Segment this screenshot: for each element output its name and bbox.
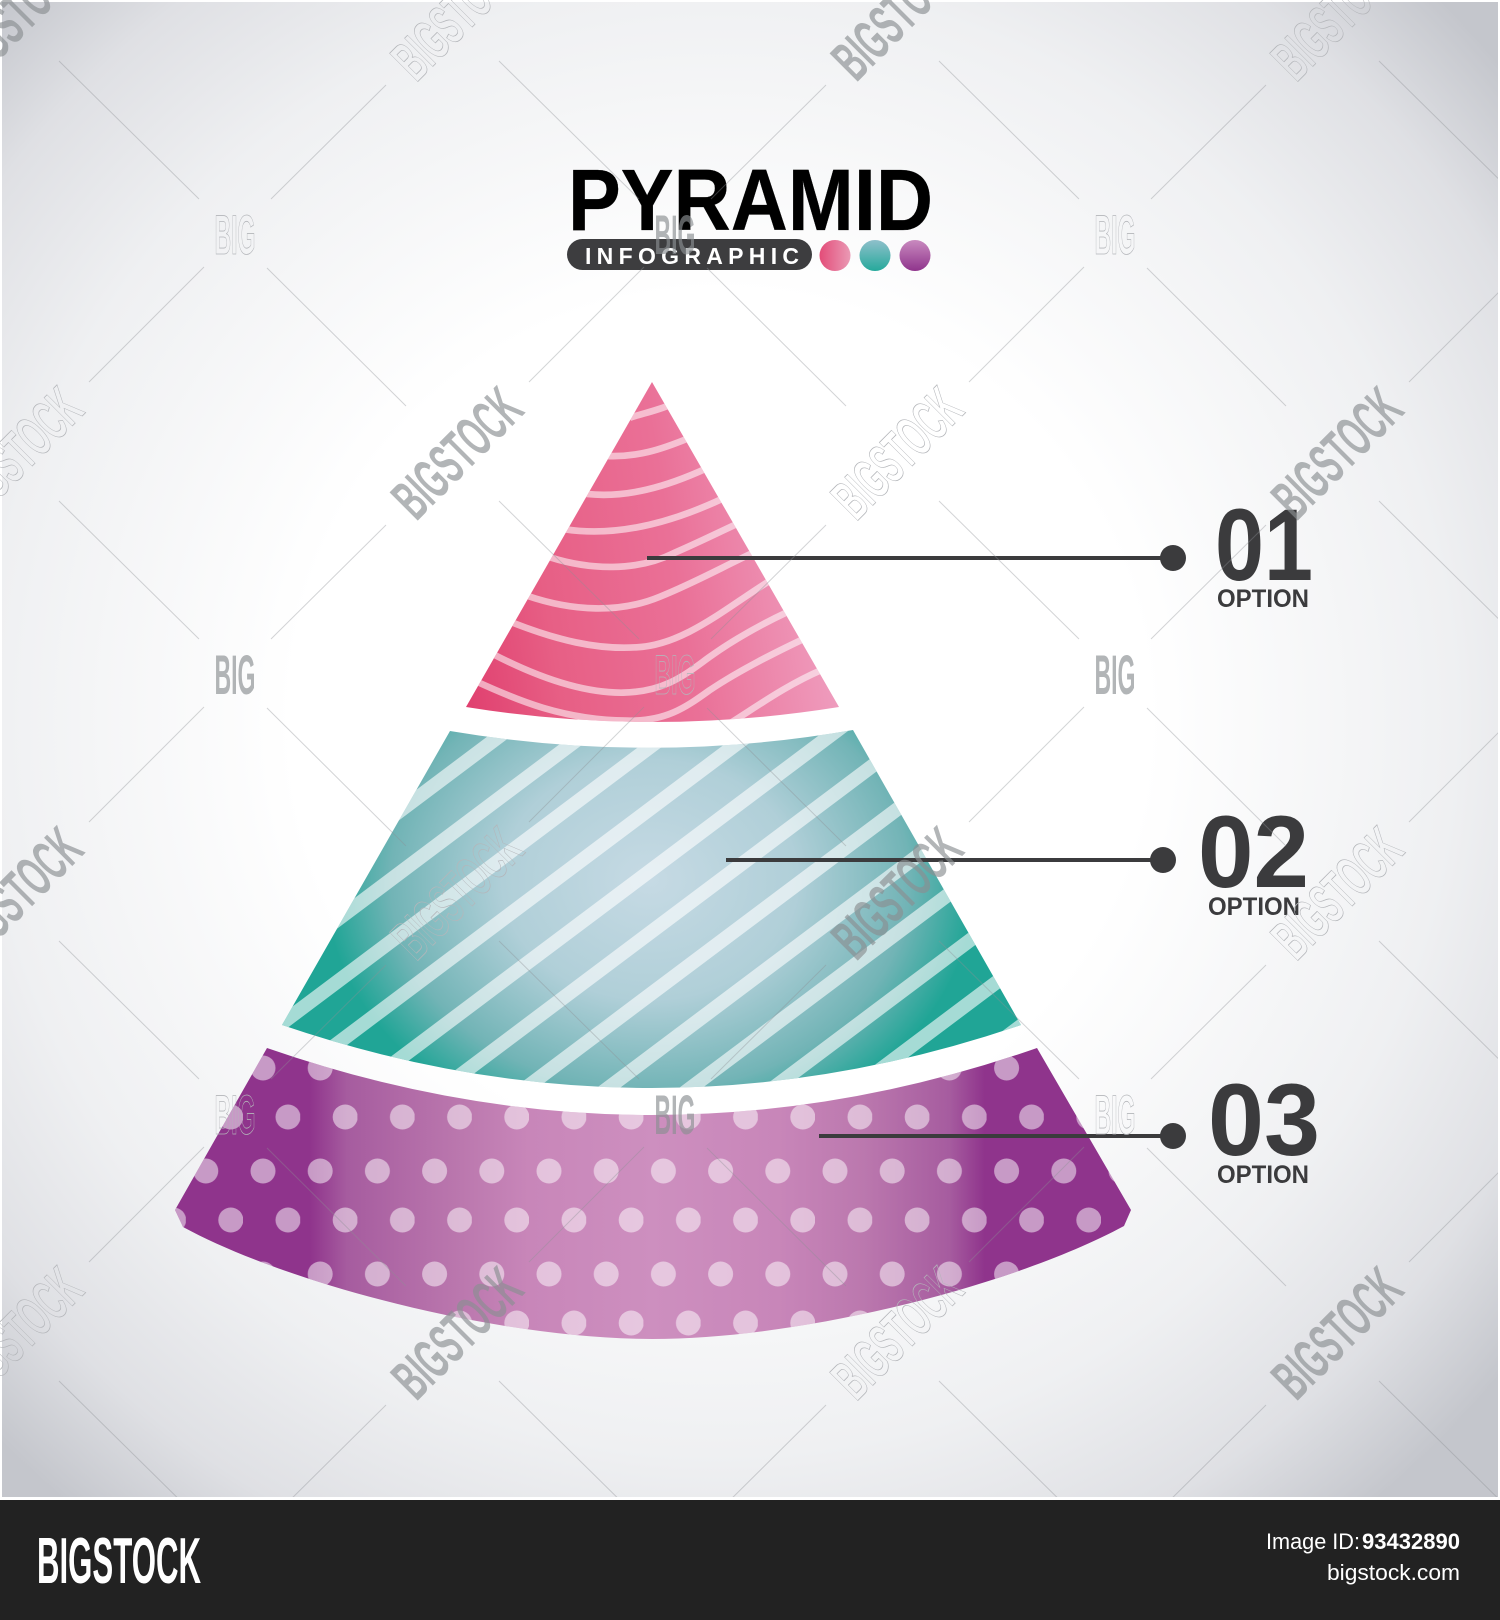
tier 3: purple dotted segment [175,1048,1131,1339]
footer bar [0,1500,1500,1620]
callout 03: 03 [1208,1063,1320,1177]
subtitle pill: INFOGRAPHIC [585,243,799,269]
watermark overlay: BIGSTOCK [380,1256,535,1411]
watermark overlay: BIGSTOCK [380,376,535,531]
image id: Image ID: [1266,1529,1360,1554]
callout 03 [819,1063,1320,1189]
site url: bigstock.com [1327,1560,1460,1585]
watermark overlay: BIG [214,203,256,266]
watermark overlay: BIG [1094,643,1136,706]
watermark overlay: BIG [654,203,696,266]
footer bar: BIGSTOCK [37,1524,201,1597]
legend dots [820,240,930,271]
callout 01: 01 [1215,488,1313,602]
watermark overlay: BIG [1094,203,1136,266]
watermark overlay: BIG [214,1083,256,1146]
watermark overlay: BIGSTOCK [820,1256,975,1411]
watermark overlay: BIG [654,1083,696,1146]
callout 01 [647,488,1313,613]
tier 1: pink wavy segment [466,382,839,723]
pyramid [175,382,1131,1339]
watermark overlay: BIGSTOCK [380,816,535,971]
watermark overlay: BIG [214,643,256,706]
tier 2: teal striped segment [282,730,1021,1088]
watermark overlay: BIGSTOCK [820,816,975,971]
watermark overlay: BIG [1094,1083,1136,1146]
callout 01: OPTION [1217,585,1309,613]
callout 02: 02 [1198,795,1309,909]
callout 02 [726,795,1309,921]
footer bar: 93432890 [1362,1529,1460,1554]
watermark overlay: BIGSTOCK [820,376,975,531]
callout 02: OPTION [1208,893,1300,921]
title: PYRAMID [568,152,933,249]
watermark overlay: BIG [654,643,696,706]
callout 03: OPTION [1217,1161,1309,1189]
